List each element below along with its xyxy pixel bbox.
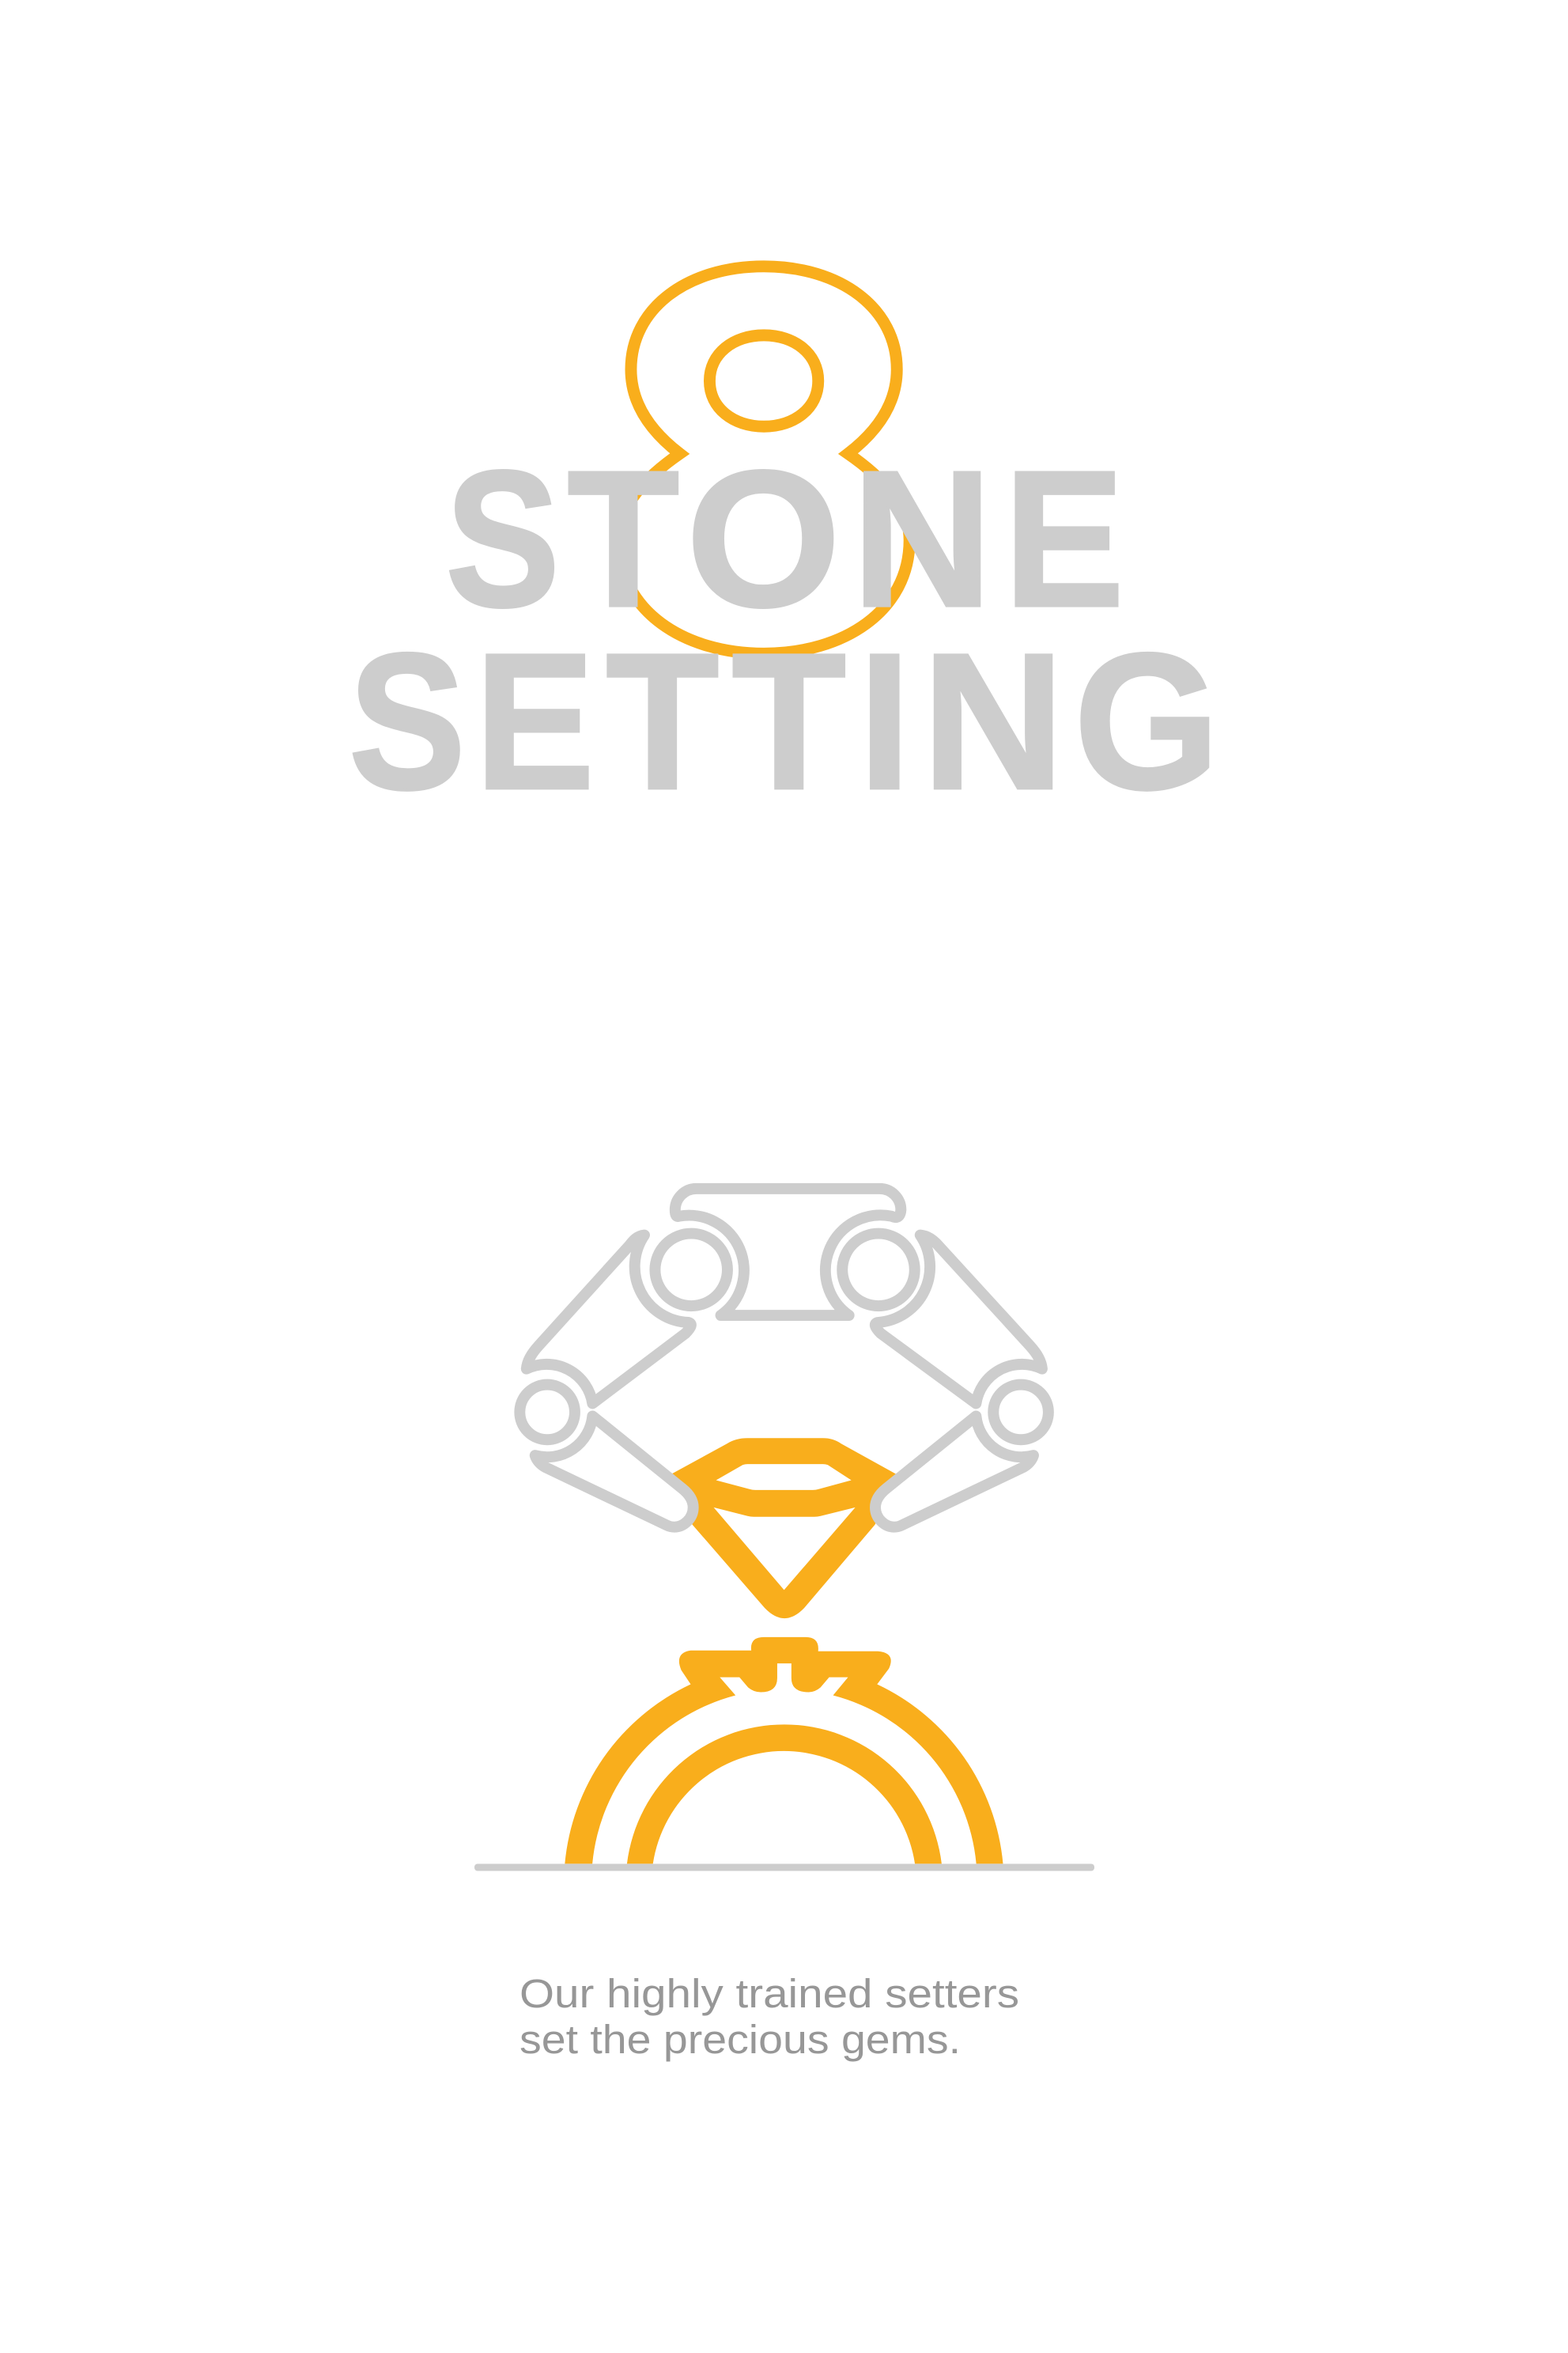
- gripper and gem: [520, 1189, 1048, 1618]
- heading: STONE: E: [1004, 430, 1124, 648]
- description text: [520, 1971, 1019, 2062]
- heading: SETTING: S: [349, 613, 466, 830]
- description text: set the precious gems.: [520, 2017, 961, 2062]
- heading: SETTING: G: [1074, 613, 1220, 830]
- heading: SETTING: N: [922, 612, 1065, 830]
- icon: diamond gem: [668, 1438, 899, 1618]
- heading: SETTING: E: [474, 614, 595, 830]
- ring outer band and setting: [565, 1637, 1003, 1863]
- icon: left lower joint: [520, 1385, 575, 1439]
- ring inner band: [627, 1724, 942, 1863]
- description text: Our highly trained setters: [520, 1971, 1019, 2016]
- numeral 8 outline: [618, 267, 909, 653]
- heading: SETTING: T: [606, 612, 719, 830]
- heading: SETTING: I: [858, 613, 911, 830]
- heading: STONE: N: [852, 431, 992, 648]
- icon: left upper joint: [655, 1234, 727, 1306]
- illustration: robotic gripper setting a gem into a ring: [474, 1189, 1094, 1871]
- heading: SETTING: T: [731, 613, 846, 830]
- icon: left gripper arm: [527, 1235, 693, 1527]
- heading: STONE: O: [686, 430, 841, 647]
- icon: ring: [565, 1637, 1003, 1863]
- icon: gripper top bracket: [675, 1189, 901, 1315]
- ground line: [474, 1863, 1094, 1871]
- icon: right lower joint: [993, 1385, 1048, 1439]
- heading: STONE: T: [567, 430, 679, 648]
- heading: STONE: [445, 430, 1124, 648]
- heading: SETTING: [349, 612, 1220, 830]
- icon: right upper joint: [842, 1234, 915, 1306]
- heading: STONE: S: [445, 431, 560, 648]
- icon: right gripper arm: [875, 1235, 1042, 1527]
